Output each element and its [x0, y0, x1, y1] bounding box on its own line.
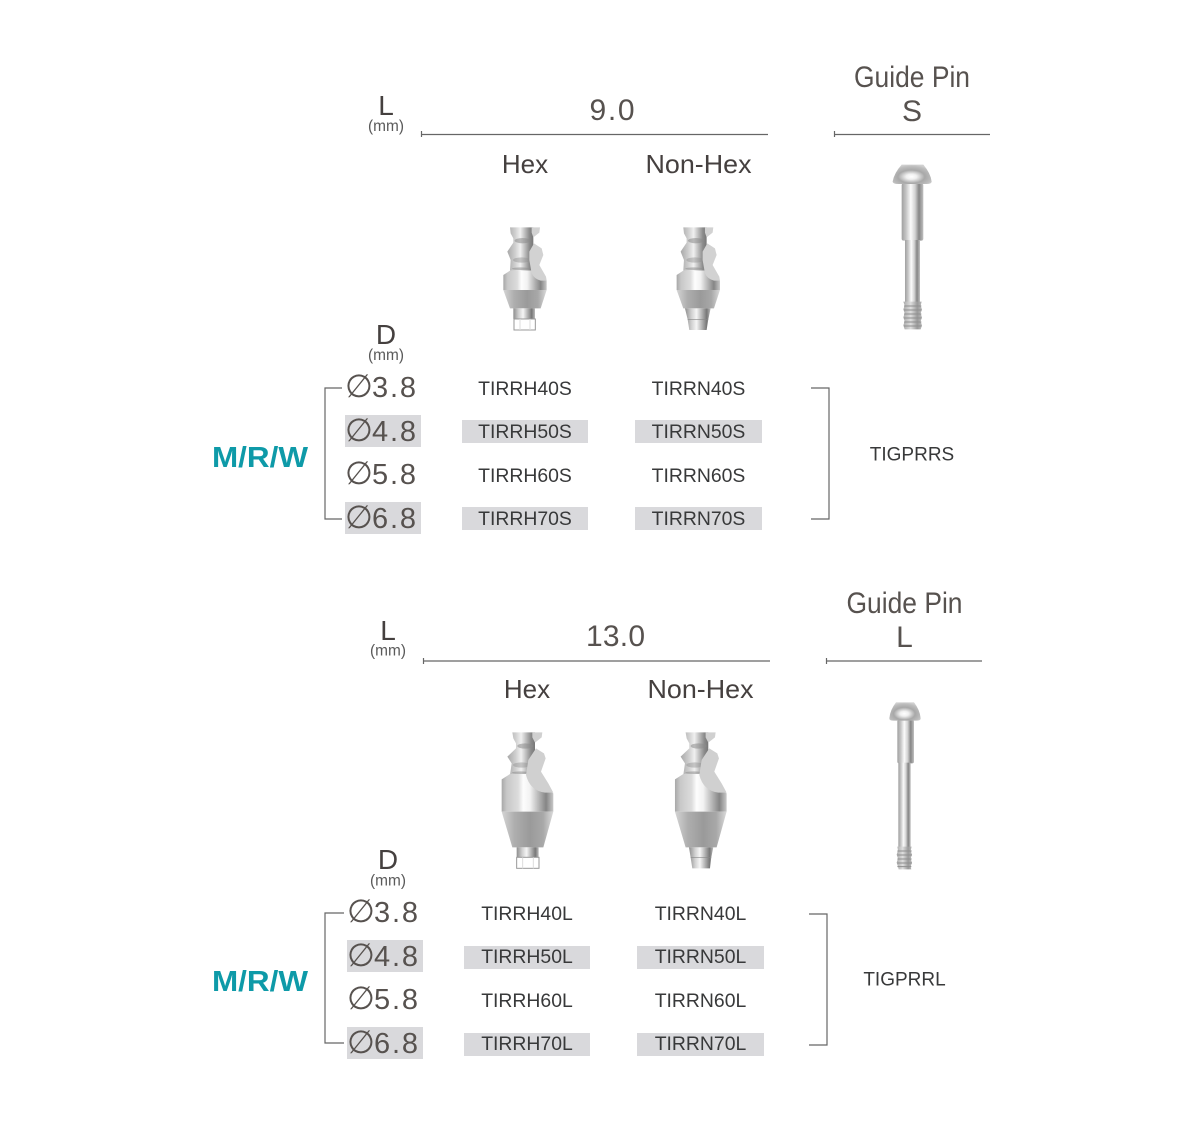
codes: hex column: TIRRH60L: [481, 990, 573, 1012]
heading: D (mm): D: [376, 319, 396, 350]
bracket: right: [811, 388, 829, 519]
diameter column: ∅: [347, 937, 375, 973]
diameter column: 3.8: [372, 372, 416, 404]
diameter column: 5.8: [374, 984, 418, 1016]
heading: L (mm): (mm): [368, 118, 404, 135]
diameter column: ∅: [345, 368, 373, 404]
codes: hex column: TIRRH40L: [481, 903, 573, 925]
codes: non-hex column: TIRRN50L: [655, 946, 747, 968]
code: guide pin S: TIGPRRS: [870, 444, 954, 466]
column heading: Hex: Hex: [502, 149, 548, 179]
heading: guide pin L: Guide Pin: [846, 587, 962, 620]
heading: D (mm): [370, 844, 406, 890]
code: guide pin L: TIGPRRL: [863, 970, 946, 990]
heading: length 9.0: [421, 94, 768, 137]
codes: hex column: [462, 378, 588, 530]
icon: short non-hex abutment: [677, 227, 720, 330]
bracket: left: [325, 388, 342, 519]
diameter column: ∅: [347, 1024, 375, 1060]
panel: length 13.0 table: [212, 587, 982, 1060]
codes: non-hex column: TIRRN70L: [655, 1033, 747, 1055]
heading: guide pin S: [834, 61, 990, 137]
codes: hex column: TIRRH60S: [478, 465, 572, 487]
diameter column: ∅: [347, 893, 375, 929]
codes: hex column: [464, 903, 590, 1056]
heading: D (mm): (mm): [368, 347, 404, 364]
codes: hex column: TIRRH70S: [478, 508, 572, 530]
diameter column: 6.8: [374, 1028, 418, 1060]
diameter column: [347, 893, 423, 1060]
diameter column: ∅: [347, 980, 375, 1016]
diameter column: 4.8: [372, 416, 416, 448]
heading: D (mm): D: [378, 844, 398, 875]
codes: non-hex column: [635, 378, 762, 530]
diameter column: 4.8: [374, 941, 418, 973]
diameter column: ∅: [345, 499, 373, 535]
heading: length 13.0: [423, 620, 770, 664]
heading: guide pin S: Guide Pin: [854, 61, 970, 94]
panel: length 9.0 table: [212, 61, 990, 535]
codes: hex column: TIRRH70L: [481, 1033, 573, 1055]
codes: non-hex column: TIRRN50S: [652, 421, 745, 443]
codes: non-hex column: TIRRN40S: [652, 378, 745, 400]
icon: guide pin L: [889, 702, 921, 869]
heading: L (mm): (mm): [370, 642, 406, 660]
heading: L (mm): [368, 90, 404, 135]
heading: guide pin L: [826, 587, 982, 664]
heading: D (mm): [368, 319, 404, 364]
label: M/R/W: M/R/W: [212, 442, 309, 474]
diameter column: ∅: [345, 455, 373, 491]
column heading: Hex: Hex: [504, 674, 550, 704]
codes: hex column: TIRRH40S: [478, 378, 572, 400]
codes: hex column: TIRRH50L: [481, 946, 573, 968]
diameter column: 5.8: [372, 459, 416, 491]
label: M/R/W: M/R/W: [212, 966, 309, 998]
bracket: right: [809, 914, 827, 1045]
diameter column: [345, 368, 421, 535]
heading: L (mm): L: [378, 90, 394, 121]
codes: non-hex column: TIRRN60L: [655, 990, 747, 1012]
heading: guide pin L: L: [896, 621, 913, 654]
heading: D (mm): (mm): [370, 872, 406, 890]
codes: non-hex column: TIRRN70S: [652, 508, 745, 530]
codes: non-hex column: TIRRN40L: [655, 903, 747, 925]
heading: length 13.0: 13.0: [586, 620, 645, 653]
column heading: Non-Hex: Non-Hex: [648, 674, 754, 704]
icon: guide pin S: [893, 165, 932, 329]
heading: length 9.0: 9.0: [590, 94, 634, 127]
codes: hex column: TIRRH50S: [478, 421, 572, 443]
icon: short hex abutment: [503, 227, 547, 330]
bracket: left: [325, 913, 344, 1043]
column heading: Non-Hex: Non-Hex: [646, 149, 752, 179]
codes: non-hex column: TIRRN60S: [652, 465, 745, 487]
diameter column: 3.8: [374, 897, 418, 929]
diameter column: 6.8: [372, 503, 416, 535]
icon: long non-hex abutment: [675, 732, 727, 868]
codes: non-hex column: [637, 903, 764, 1056]
heading: L (mm): L: [380, 615, 396, 646]
heading: guide pin S: S: [902, 95, 922, 128]
diameter column: ∅: [345, 412, 373, 448]
heading: L (mm): [370, 615, 406, 660]
icon: long hex abutment: [502, 732, 553, 868]
